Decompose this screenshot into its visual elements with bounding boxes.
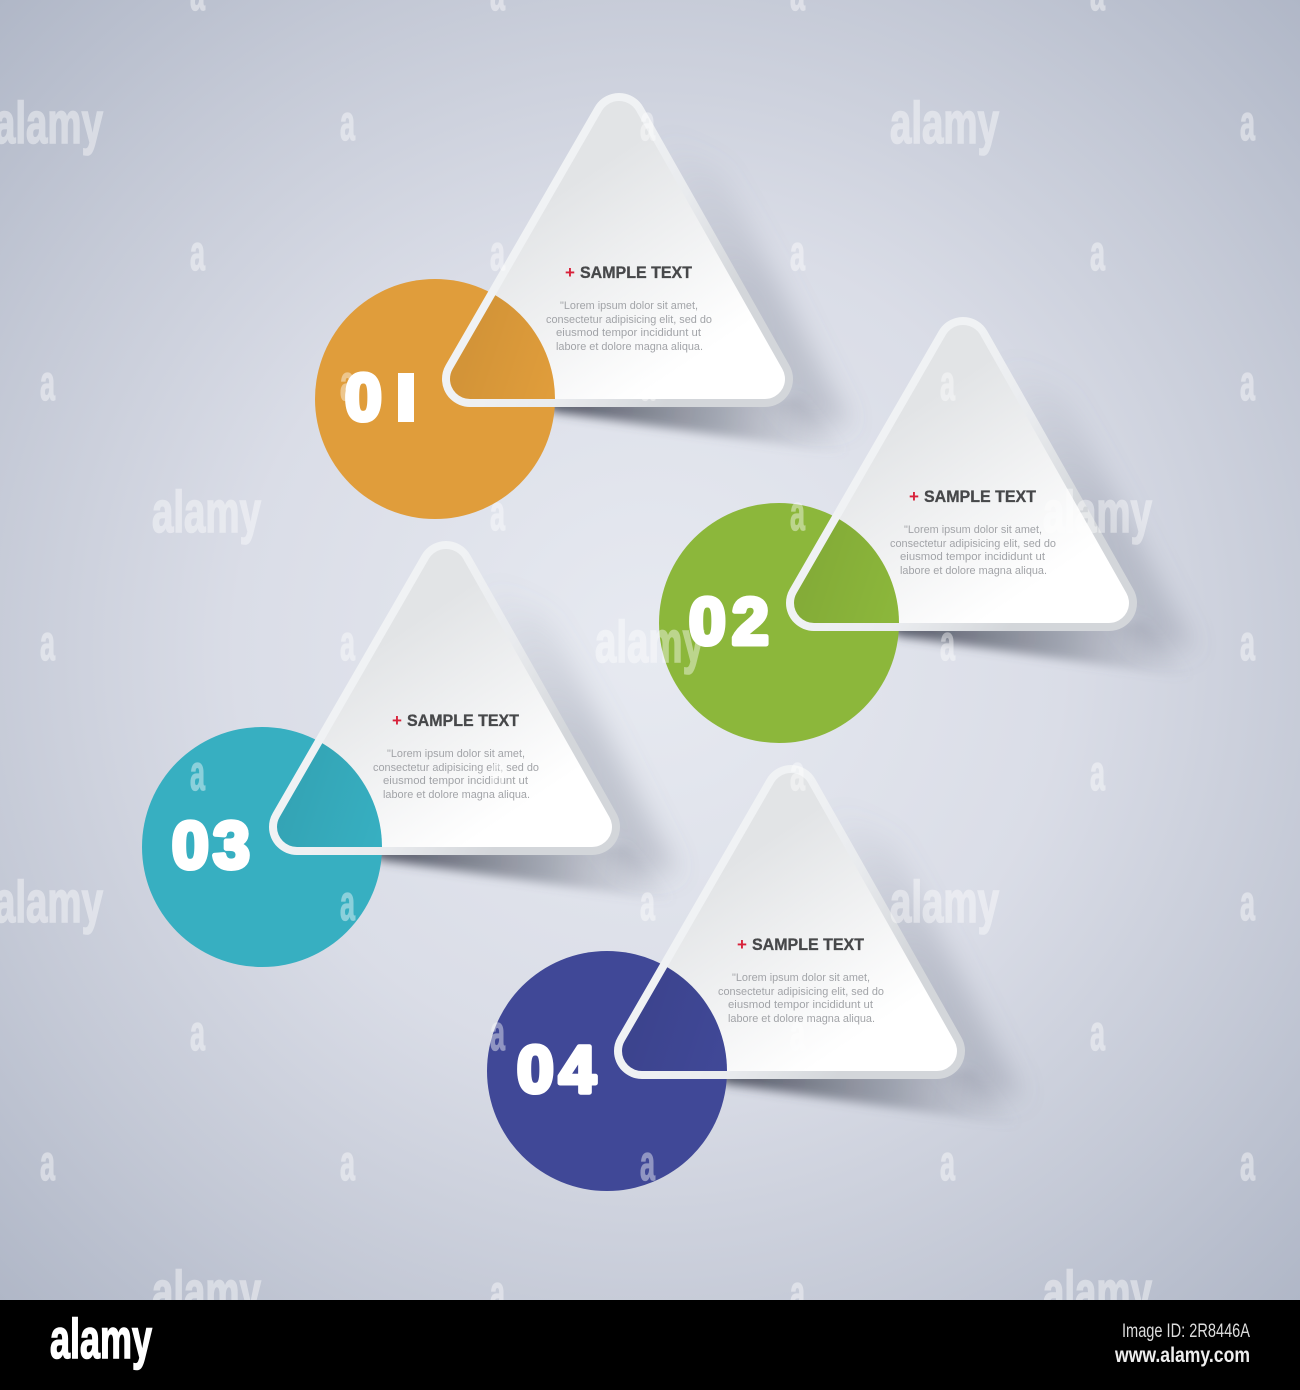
watermarks: alamy <box>152 480 261 545</box>
card 02 body text: eiusmod tempor incididunt ut <box>900 551 1045 563</box>
card 03 heading: + <box>392 711 402 730</box>
watermarks: alamy <box>152 1260 261 1325</box>
card 03 body text: eiusmod tempor incididunt ut <box>383 775 528 787</box>
card 02 heading: SAMPLE TEXT <box>924 487 1037 506</box>
card 02 heading: + <box>909 487 919 506</box>
watermarks: alamy <box>1043 480 1152 545</box>
card 02 shadow <box>874 349 1194 678</box>
watermarks: a <box>1090 1005 1106 1061</box>
card 03 shadow <box>357 573 677 902</box>
watermarks: a <box>190 225 206 281</box>
card 02 triangle panel <box>814 345 1109 603</box>
watermarks: a <box>490 745 506 801</box>
card 01 body text: "Lorem ipsum dolor sit amet, <box>560 300 698 312</box>
watermarks: a <box>790 225 806 281</box>
card 03 triangle panel <box>297 569 592 827</box>
card 04 heading: SAMPLE TEXT <box>752 935 865 954</box>
footer website: www.alamy.com <box>1114 1344 1250 1367</box>
watermarks: a <box>40 1135 56 1191</box>
card 04 shadow <box>702 797 1022 1126</box>
watermarks: a <box>1240 615 1256 671</box>
card 04 body text: labore et dolore magna aliqua. <box>728 1013 875 1025</box>
card 02 <box>659 345 1194 743</box>
watermarks: a <box>340 615 356 671</box>
watermarks: a <box>790 1005 806 1061</box>
watermarks: a <box>940 1135 956 1191</box>
card 04 circle seen through triangle <box>622 967 727 1071</box>
card 02 body text: consectetur adipisicing elit, sed do <box>890 538 1056 550</box>
card 04 heading: + <box>737 935 747 954</box>
footer bar <box>0 1300 1300 1390</box>
watermarks: a <box>940 355 956 411</box>
card 04 number: 04 <box>517 1032 596 1106</box>
watermarks: a <box>490 1265 506 1321</box>
watermarks: a <box>640 1135 656 1191</box>
card 01 body text: eiusmod tempor incididunt ut <box>556 327 701 339</box>
card 02 green circle <box>659 503 899 743</box>
watermarks: a <box>1240 95 1256 151</box>
card 04 triangle panel <box>642 793 937 1051</box>
watermarks: alamy <box>1043 1260 1152 1325</box>
card 01 circle seen through triangle <box>450 295 555 399</box>
watermarks: a <box>190 745 206 801</box>
card 01 triangle panel <box>470 121 765 379</box>
card 03 body text: "Lorem ipsum dolor sit amet, <box>387 748 525 760</box>
watermarks: a <box>1090 225 1106 281</box>
card 01 orange circle <box>315 279 555 519</box>
watermarks: a <box>790 485 806 541</box>
card 03 body text: consectetur adipisicing elit, sed do <box>373 762 539 774</box>
card 01 heading: + <box>565 263 575 282</box>
watermarks: alamy <box>595 610 704 675</box>
card 01 <box>315 121 850 519</box>
card 03 number: 03 <box>172 808 250 882</box>
card 04 body text: "Lorem ipsum dolor sit amet, <box>732 972 870 984</box>
watermarks: a <box>340 875 356 931</box>
card 02 body text <box>890 524 1056 577</box>
card 02 body text: "Lorem ipsum dolor sit amet, <box>904 524 1042 536</box>
card 01 number: 0 <box>345 360 382 434</box>
watermarks: a <box>790 1265 806 1321</box>
card 03 body text: labore et dolore magna aliqua. <box>383 789 530 801</box>
card 01 shadow <box>530 125 850 454</box>
watermarks: a <box>640 875 656 931</box>
watermarks: a <box>490 225 506 281</box>
watermarks: a <box>340 95 356 151</box>
watermarks: alamy <box>890 870 999 935</box>
card 03 heading: SAMPLE TEXT <box>407 711 520 730</box>
card 04 body text: eiusmod tempor incididunt ut <box>728 999 873 1011</box>
card 02 body text: labore et dolore magna aliqua. <box>900 565 1047 577</box>
watermarks: a <box>1090 745 1106 801</box>
watermarks: a <box>340 1135 356 1191</box>
card 03 circle seen through triangle <box>277 743 382 847</box>
card 01 body text: consectetur adipisicing elit, sed do <box>546 314 712 326</box>
watermarks: alamy <box>890 91 999 156</box>
watermarks: a <box>640 355 656 411</box>
card 04 body text <box>718 972 884 1025</box>
card 01: 1 <box>399 365 413 434</box>
watermarks: a <box>190 1005 206 1061</box>
watermarks: a <box>640 95 656 151</box>
card 02 number: 02 <box>689 584 769 658</box>
card 01 number <box>345 360 414 434</box>
watermarks: a <box>790 745 806 801</box>
watermarks: a <box>40 355 56 411</box>
card 04 navy circle <box>487 951 727 1191</box>
card 04 body text: consectetur adipisicing elit, sed do <box>718 986 884 998</box>
card 03 teal circle <box>142 727 382 967</box>
watermarks: a <box>1240 875 1256 931</box>
footer logo: alamy <box>50 1307 152 1370</box>
watermarks: a <box>40 615 56 671</box>
footer image id: Image ID: 2R8446A <box>1122 1321 1250 1342</box>
watermarks: a <box>490 1005 506 1061</box>
watermarks: a <box>1240 1135 1256 1191</box>
card 01 heading: SAMPLE TEXT <box>580 263 693 282</box>
card 03 <box>142 569 677 967</box>
watermarks: a <box>490 485 506 541</box>
watermarks: a <box>940 615 956 671</box>
card 03 body text <box>373 748 539 801</box>
watermarks: a <box>340 355 356 411</box>
card 04 <box>487 793 1022 1191</box>
card 01 body text <box>546 300 712 353</box>
card 02 circle seen through triangle <box>794 519 899 623</box>
card 01 body text: labore et dolore magna aliqua. <box>556 341 703 353</box>
watermarks: a <box>1240 355 1256 411</box>
